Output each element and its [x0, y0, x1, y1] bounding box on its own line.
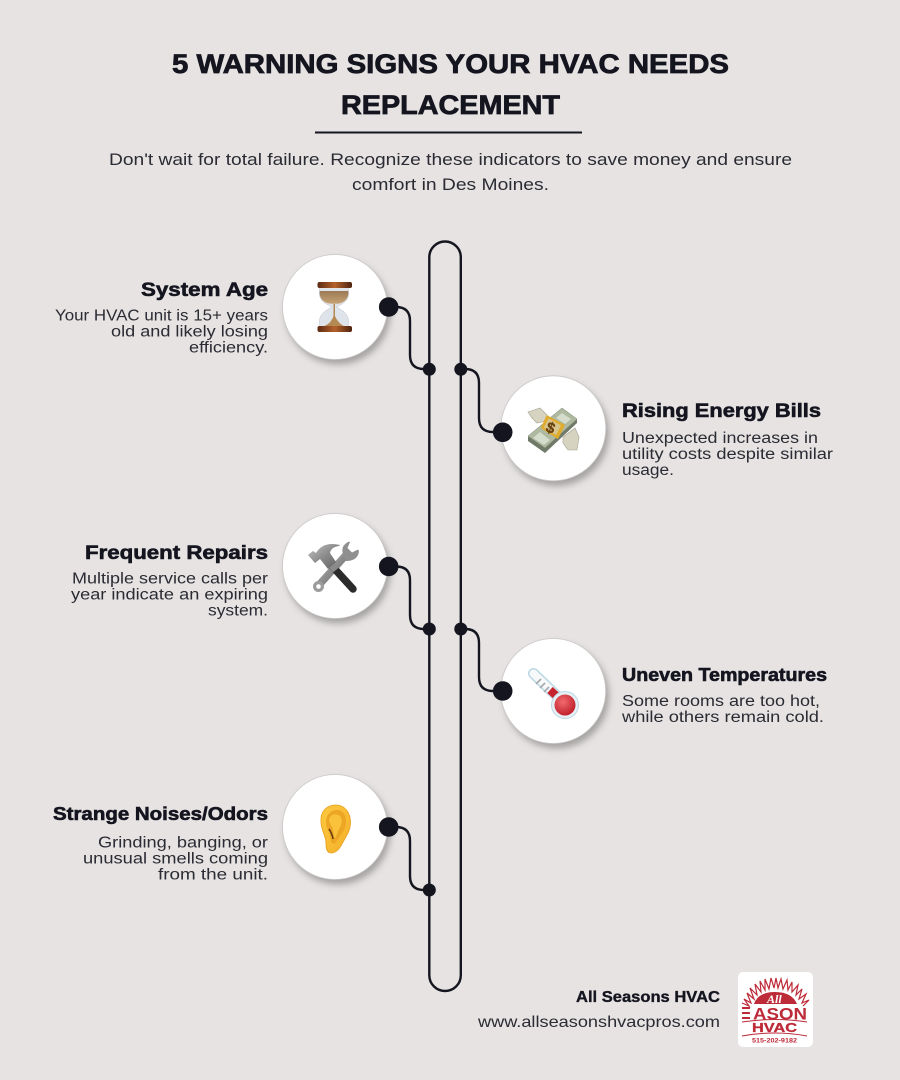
- circle 1: [282, 254, 390, 364]
- text 5: Strange Noises/Odors: [53, 803, 268, 824]
- circle 5: [282, 774, 390, 884]
- big dot 5: [379, 817, 399, 837]
- subtitle: [109, 150, 792, 194]
- text 3: Multiple service calls per: [72, 570, 268, 588]
- text 5: Grinding, banging, or: [98, 834, 268, 852]
- text 3: Frequent Repairs: [85, 542, 268, 564]
- footer company text: [477, 989, 720, 1031]
- small dot 1: [423, 363, 436, 376]
- step 1: system age: [55, 254, 436, 376]
- step 2: rising energy bills: [454, 363, 833, 486]
- logo lettering: 515-202-9182: [752, 1038, 797, 1044]
- text 3: year indicate an expiring: [71, 586, 268, 604]
- icon: thermometer: [534, 674, 578, 718]
- connector 5: [389, 827, 429, 890]
- text 2: Rising Energy Bills: [622, 400, 821, 422]
- text 4: while others remain cold.: [621, 709, 824, 726]
- logo lettering: ASON: [753, 1004, 807, 1024]
- logo dome: [754, 992, 797, 1004]
- logo lettering: HVAC: [752, 1020, 798, 1035]
- small dot 5: [423, 884, 436, 896]
- text 2: usage.: [622, 462, 674, 479]
- title: [172, 49, 729, 120]
- logo lettering: All: [766, 992, 782, 1006]
- text 2: [622, 400, 833, 479]
- text 2: Unexpected increases in: [622, 430, 818, 447]
- logo: [738, 972, 813, 1047]
- big dot 1: [379, 297, 399, 317]
- text 4: Uneven Temperatures: [622, 664, 827, 685]
- text 1: System Age: [141, 279, 268, 301]
- circle 2: [501, 376, 609, 486]
- step 3: frequent repairs: [71, 514, 436, 636]
- big dot 3: [379, 557, 399, 576]
- text 3: system.: [208, 602, 268, 620]
- step 5: strange noises: [53, 774, 436, 896]
- icon: money with wings: $: [544, 419, 558, 438]
- step 4: uneven temperatures: [454, 622, 827, 748]
- subtitle: comfort in Des Moines.: [352, 175, 549, 194]
- logo lettering: [742, 992, 807, 1044]
- icon: hammer and wrench: [308, 542, 359, 592]
- big dot 4: [493, 681, 512, 701]
- footer company text: All Seasons HVAC: [576, 989, 720, 1006]
- small dot 2: [454, 363, 467, 376]
- text 4: Some rooms are too hot,: [622, 693, 820, 710]
- connector 4: [461, 629, 503, 691]
- text 5: [53, 803, 268, 884]
- subtitle: Don't wait for total failure. Recognize these indicators to save money and ensure: [109, 150, 792, 169]
- connector 3: [389, 566, 429, 629]
- text 1: [55, 279, 268, 356]
- title: 5 WARNING SIGNS YOUR HVAC NEEDS: [172, 49, 729, 79]
- small dot 3: [423, 622, 436, 636]
- text 4: [621, 664, 827, 726]
- footer company text: www.allseasonshvacpros.com: [477, 1014, 720, 1031]
- connector 2: [461, 369, 503, 432]
- icon: money with wings: [528, 408, 579, 453]
- icon: hourglass: [318, 282, 352, 332]
- text 5: unusual smells coming: [83, 850, 268, 868]
- title underline: [315, 132, 582, 134]
- circle 4: [501, 638, 609, 748]
- big dot 2: [493, 422, 512, 442]
- icon: ear: [321, 805, 351, 853]
- title: REPLACEMENT: [341, 90, 561, 120]
- text 5: from the unit.: [158, 866, 268, 884]
- text 1: Your HVAC unit is 15+ years: [55, 308, 268, 324]
- circle 3: [282, 514, 390, 624]
- central timeline track: [429, 242, 461, 991]
- logo sun rays: [742, 978, 809, 1006]
- connector 1: [389, 307, 429, 369]
- text 1: old and likely losing: [111, 324, 268, 340]
- text 2: utility costs despite similar: [622, 446, 833, 463]
- small dot 4: [454, 622, 467, 636]
- text 1: efficiency.: [189, 340, 268, 356]
- text 3: [71, 542, 268, 620]
